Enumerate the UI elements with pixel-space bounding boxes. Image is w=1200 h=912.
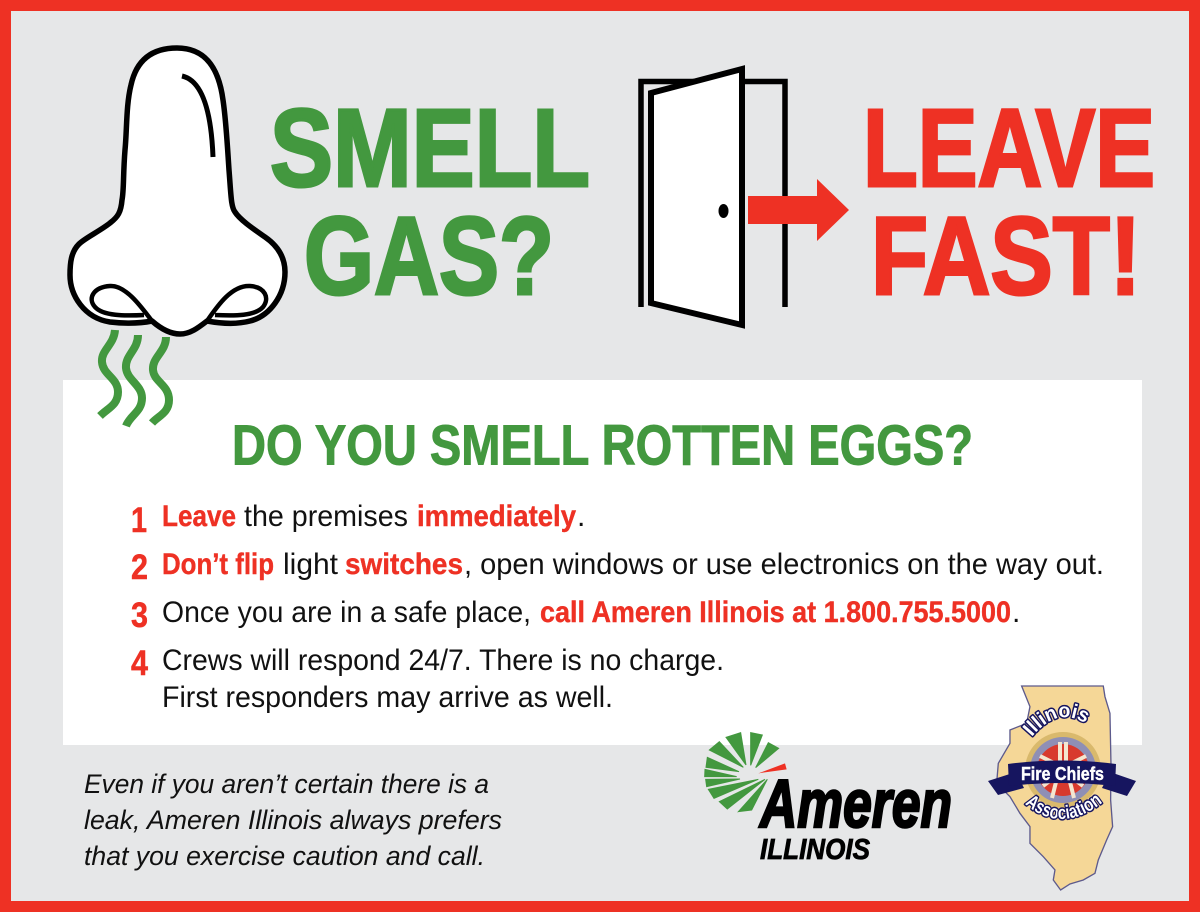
seal text: Illinois: Illinois (1020, 702, 1090, 738)
seal text: Association: Association (1024, 794, 1104, 821)
note: caution: Even if you aren’t certain there is a (84, 769, 489, 799)
heading: smell gas: GAS? (304, 195, 554, 318)
step 3: Once you are in a safe place, (162, 596, 531, 629)
step 4: 4 (131, 644, 148, 683)
step 1: the premises (244, 500, 408, 533)
step 3 (131, 596, 1020, 635)
panel: instructions (63, 380, 1142, 745)
icon: nose (70, 48, 285, 334)
step 1: Leave (162, 500, 236, 533)
step 1 (131, 500, 585, 540)
logo: Ameren Illinois: ILLINOIS (760, 834, 871, 866)
icon: green odor lines (100, 330, 169, 426)
heading: smell gas: SMELL (270, 87, 590, 210)
step 1: immediately (417, 500, 576, 533)
step 3: . (1012, 596, 1020, 629)
step 4 (131, 644, 724, 714)
step 1: . (577, 500, 585, 533)
heading: smell gas (270, 87, 590, 318)
logo: Illinois Fire Chiefs Association (988, 685, 1136, 891)
icon: open door (641, 69, 785, 325)
heading: leave fast: FAST! (871, 195, 1141, 318)
note: caution: that you exercise caution and call. (84, 841, 485, 871)
icon: Ameren sunburst (705, 733, 787, 812)
logo: Illinois Fire Chiefs Association: Fire Chiefs (1021, 764, 1104, 784)
banner: Fire Chiefs (1008, 760, 1116, 786)
banner tails (988, 772, 1136, 796)
note: caution: leak, Ameren Illinois always prefers (84, 805, 502, 835)
step 4: Crews will respond 24/7. There is no charge. (162, 644, 724, 677)
step 2: , open windows or use electronics on the way out. (464, 548, 1104, 581)
step 2: 2 (131, 548, 148, 587)
heading: do you smell rotten eggs: DO YOU SMELL ROTTEN EGGS? (232, 414, 973, 478)
step 2: Don’t flip (162, 548, 274, 581)
step 3: call Ameren Illinois at 1.800.755.5000 (540, 596, 1011, 629)
step 2 (131, 548, 1104, 587)
step 4: First responders may arrive as well. (162, 681, 613, 714)
heading: leave fast (863, 87, 1155, 318)
step 2: switches (345, 548, 463, 581)
step 1: 1 (131, 501, 147, 540)
Illinois state shape (997, 686, 1113, 890)
step 3: 3 (131, 596, 148, 635)
logo: Ameren Illinois: Ameren (758, 766, 952, 842)
step 2: light (283, 548, 339, 581)
note: caution (84, 769, 502, 871)
arrow: exit (748, 179, 849, 241)
logo: Ameren Illinois (705, 733, 952, 866)
seal (1025, 732, 1101, 808)
